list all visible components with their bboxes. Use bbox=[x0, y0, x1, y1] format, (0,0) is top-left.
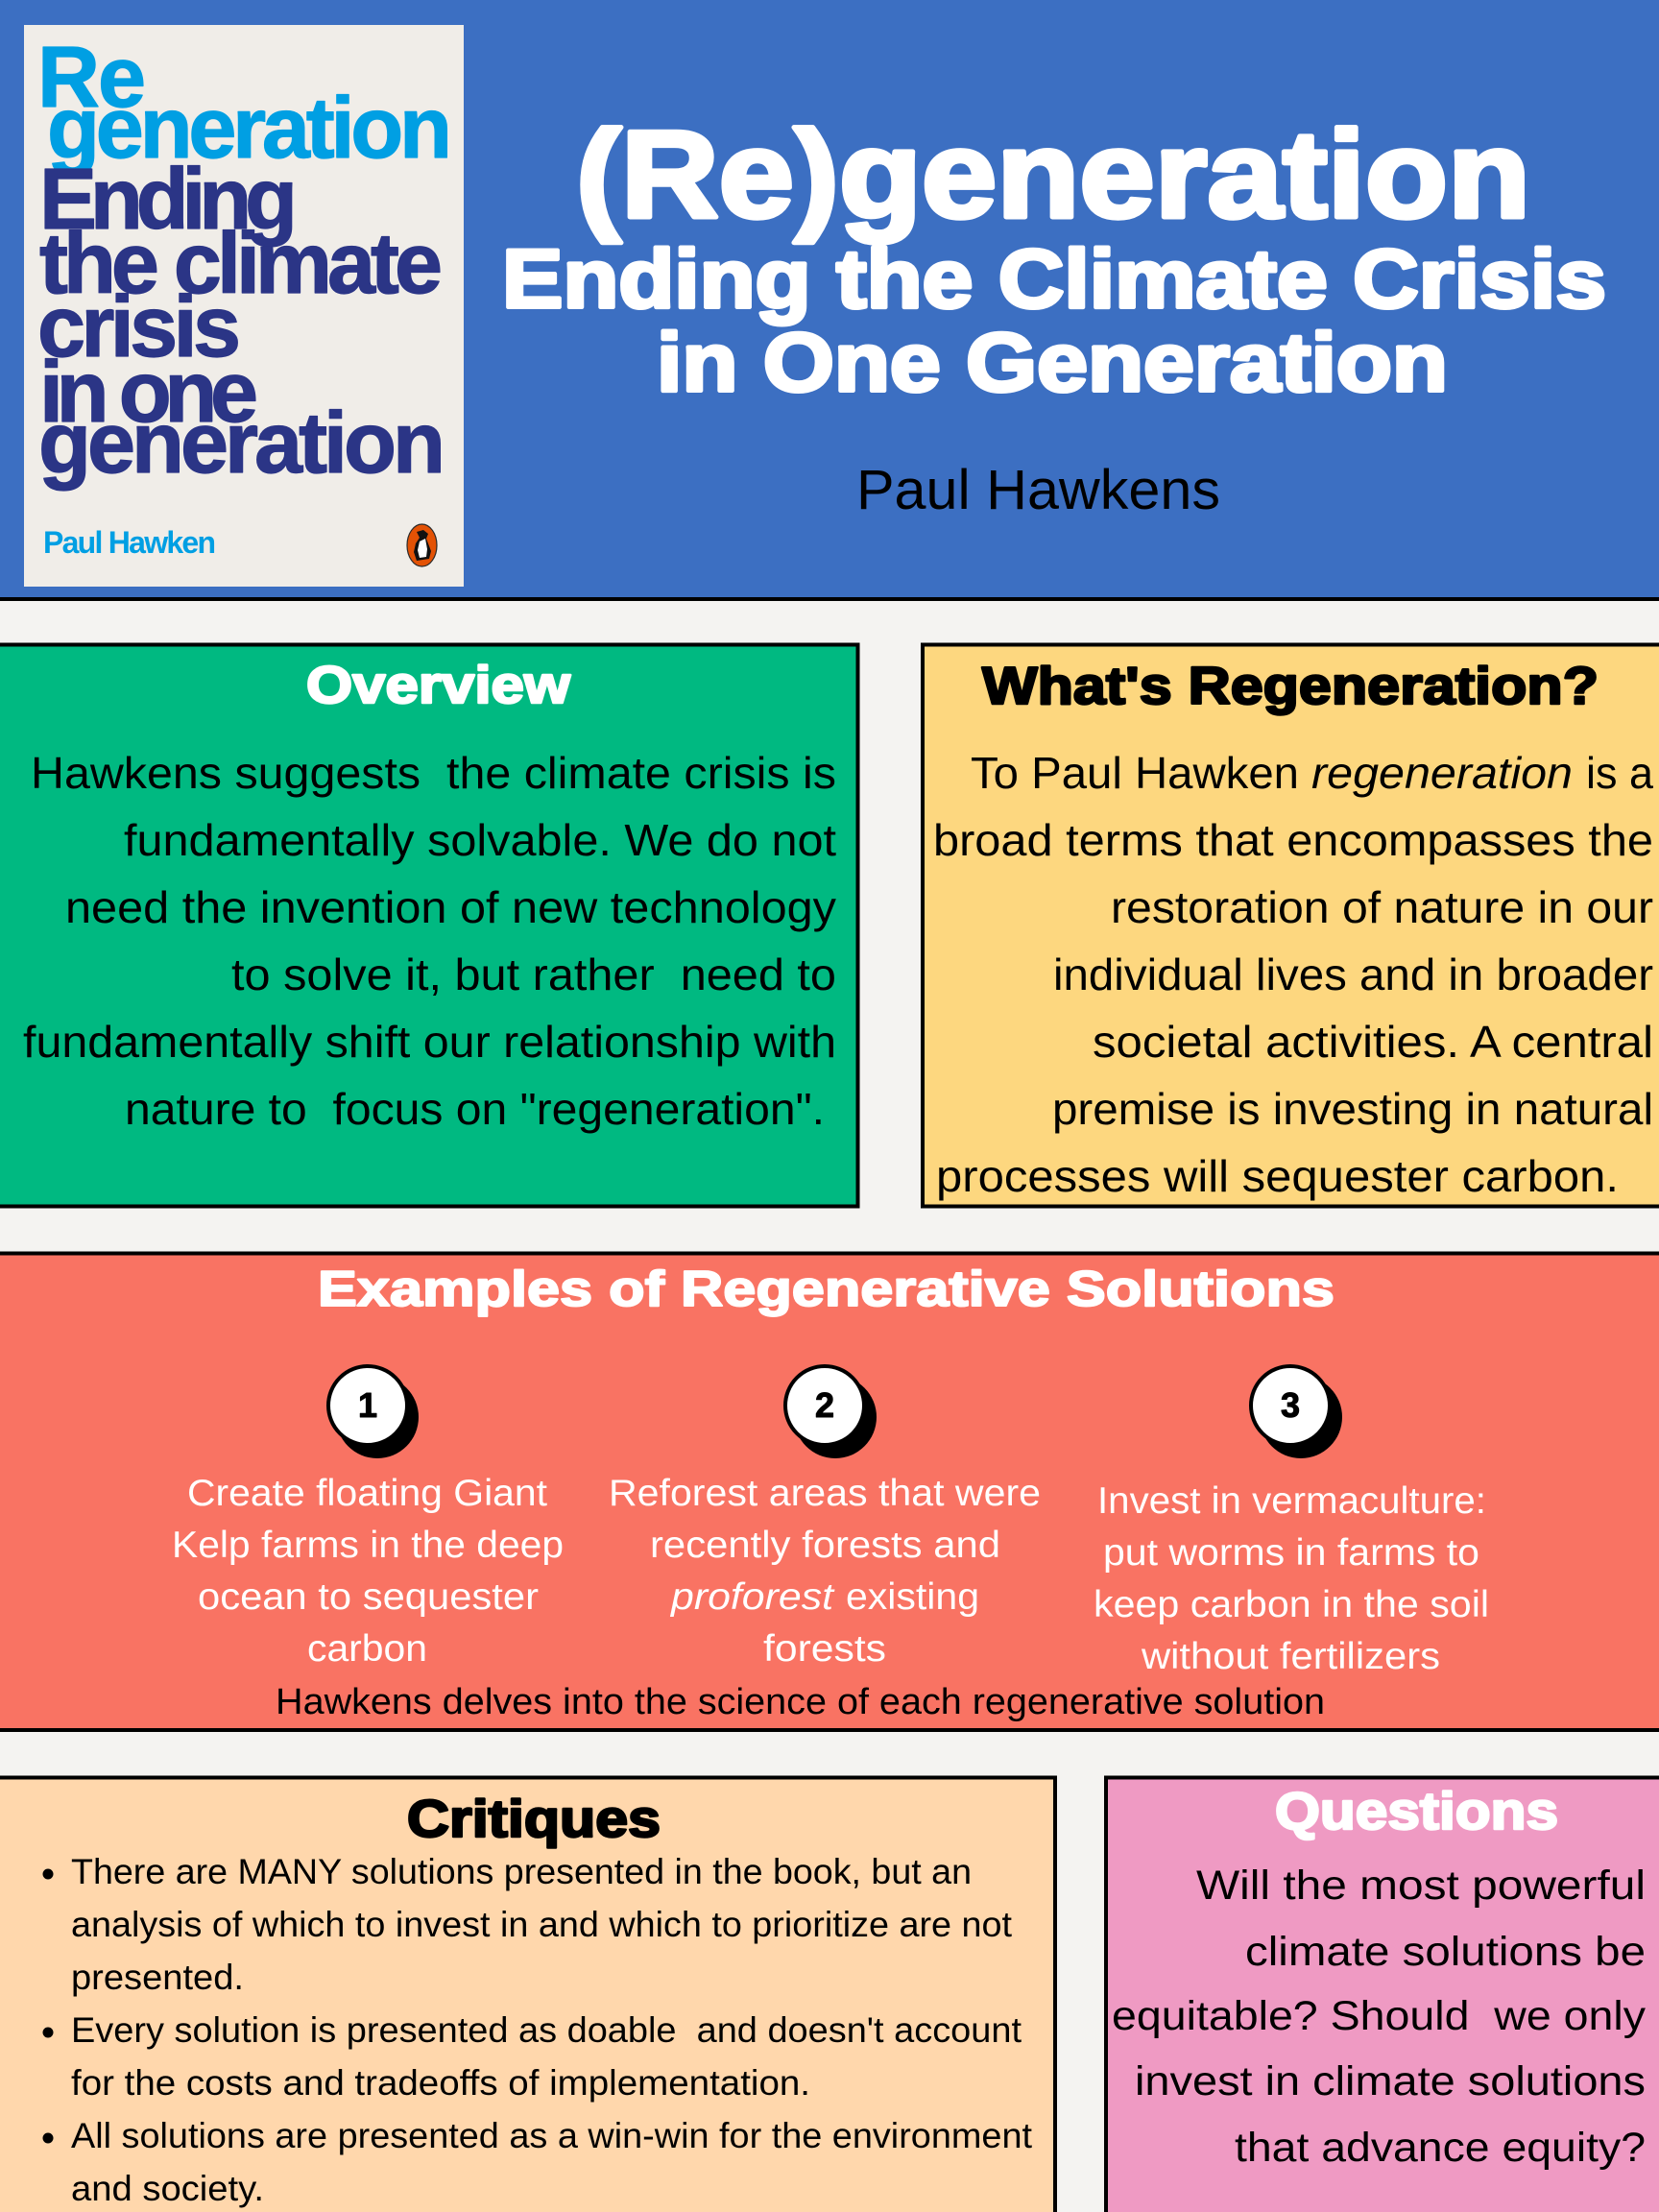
title: in One Generation bbox=[657, 317, 1448, 409]
text: overview body: Hawkens suggests the climate crisis is bbox=[31, 748, 836, 798]
heading: critiques: Critiques bbox=[407, 1789, 661, 1848]
book cover: generation bbox=[38, 396, 445, 492]
text: solution 1: Create floating Giant bbox=[187, 1473, 547, 1514]
heading: overview: Overview bbox=[306, 655, 570, 714]
text: regeneration body bbox=[933, 748, 1653, 1201]
text: solution 3: keep carbon in the soil bbox=[1094, 1584, 1489, 1625]
author: Paul Hawkens bbox=[856, 459, 1220, 521]
text: questions body bbox=[1112, 1863, 1647, 2171]
list: critique 2: Every solution is presented as doable and doesn't account bbox=[71, 2010, 1022, 2050]
text: solution 3 bbox=[1094, 1480, 1489, 1677]
text: science note: Hawkens delves into the science of each regenerative solution bbox=[276, 1682, 1325, 1722]
heading: examples: Examples of Regenerative Solutions bbox=[318, 1262, 1334, 1317]
icon: number badge 3 bbox=[1251, 1366, 1342, 1458]
heading: questions: Questions bbox=[1275, 1781, 1558, 1840]
text: overview body: fundamentally shift our relationship with bbox=[23, 1017, 836, 1067]
book cover: Ending bbox=[39, 152, 298, 248]
text: overview body: fundamentally solvable. We do not bbox=[124, 815, 836, 865]
text: regeneration body: individual lives and in broader bbox=[1053, 950, 1653, 999]
text: regeneration body: is a bbox=[1586, 748, 1653, 798]
panel: critiques bbox=[0, 1778, 1055, 2212]
text: solution 2: proforest bbox=[670, 1576, 835, 1618]
text: questions body: that advance equity? bbox=[1235, 2125, 1646, 2171]
book cover: Re bbox=[37, 30, 146, 126]
text: questions body: invest in climate solutions bbox=[1135, 2058, 1646, 2104]
text: solution 1: carbon bbox=[307, 1628, 427, 1670]
panel: what's regeneration bbox=[923, 645, 1659, 1206]
list: critique 3: All solutions are presented as a win-win for the environment bbox=[71, 2116, 1033, 2155]
title: (Re)generation bbox=[576, 106, 1530, 244]
text: regeneration body: broad terms that encompasses the bbox=[933, 815, 1653, 865]
book cover: in one bbox=[39, 345, 258, 441]
title bbox=[502, 106, 1606, 409]
text: solution 1 bbox=[172, 1473, 564, 1670]
icon: number badge 2 bbox=[785, 1366, 877, 1458]
text: regeneration body: regeneration bbox=[1311, 748, 1573, 798]
text: overview body: need the invention of new technology bbox=[65, 882, 836, 932]
text: questions body: Will the most powerful bbox=[1196, 1863, 1646, 1909]
text: questions body: equitable? Should we only bbox=[1112, 1993, 1647, 2039]
book cover: generation bbox=[47, 81, 452, 177]
book cover: Paul Hawken bbox=[43, 525, 216, 560]
text: overview body: nature to focus on "regeneration". bbox=[125, 1084, 825, 1134]
panel: questions bbox=[1106, 1778, 1659, 2212]
text: regeneration body: premise is investing in natural bbox=[1052, 1084, 1653, 1134]
heading: what's regeneration: What's Regeneration? bbox=[982, 656, 1599, 715]
icon: number badge 1: 1 bbox=[358, 1385, 377, 1425]
text: solution 3: Invest in vermaculture: bbox=[1097, 1480, 1486, 1522]
list: critique 1: There are MANY solutions presented in the book, but an bbox=[71, 1852, 972, 1891]
text: solution 2: forests bbox=[763, 1628, 886, 1670]
text: solution 3: put worms in farms to bbox=[1103, 1532, 1479, 1574]
text: solution 2: existing bbox=[846, 1576, 979, 1618]
list: critique 3: and society. bbox=[71, 2169, 264, 2208]
book cover: the climate bbox=[39, 216, 443, 312]
text: solution 3: without fertilizers bbox=[1141, 1636, 1440, 1677]
icon: number badge 1 bbox=[328, 1366, 419, 1458]
text: overview body: to solve it, but rather need to bbox=[231, 950, 836, 999]
list: critique 1 bbox=[42, 1852, 1013, 1997]
text: overview body bbox=[23, 748, 836, 1134]
text: regeneration body: societal activities. A central bbox=[1093, 1017, 1653, 1067]
list: critique 1: presented. bbox=[71, 1958, 244, 1997]
text: solution 2: Reforest areas that were bbox=[609, 1473, 1041, 1514]
panel: examples of regenerative solutions bbox=[0, 1254, 1659, 1730]
list: critique 3 bbox=[42, 2116, 1033, 2208]
book cover: crisis bbox=[37, 279, 241, 375]
panel: overview bbox=[0, 645, 858, 1206]
icon: number badge 2: 2 bbox=[815, 1385, 834, 1425]
list: critique 2: for the costs and tradeoffs of implementation. bbox=[71, 2063, 810, 2103]
text: regeneration body: processes will sequester carbon. bbox=[936, 1151, 1619, 1201]
header banner bbox=[0, 0, 1659, 601]
icon: number badge 3: 3 bbox=[1281, 1385, 1300, 1425]
book cover bbox=[24, 25, 464, 587]
text: solution 2: recently forests and bbox=[650, 1525, 1000, 1566]
text: solution 1: ocean to sequester bbox=[198, 1576, 539, 1618]
text: regeneration body: restoration of nature in our bbox=[1111, 882, 1653, 932]
list: critique 1: analysis of which to invest in and which to prioritize are not bbox=[71, 1905, 1013, 1944]
text: questions body: climate solutions be bbox=[1245, 1929, 1646, 1975]
title: Ending the Climate Crisis bbox=[502, 233, 1606, 325]
icon: penguin logo bbox=[407, 524, 437, 566]
text: regeneration body: To Paul Hawken bbox=[971, 748, 1299, 798]
list: critique 2 bbox=[42, 2010, 1022, 2103]
text: solution 2 bbox=[609, 1473, 1041, 1670]
text: solution 1: Kelp farms in the deep bbox=[172, 1525, 564, 1566]
